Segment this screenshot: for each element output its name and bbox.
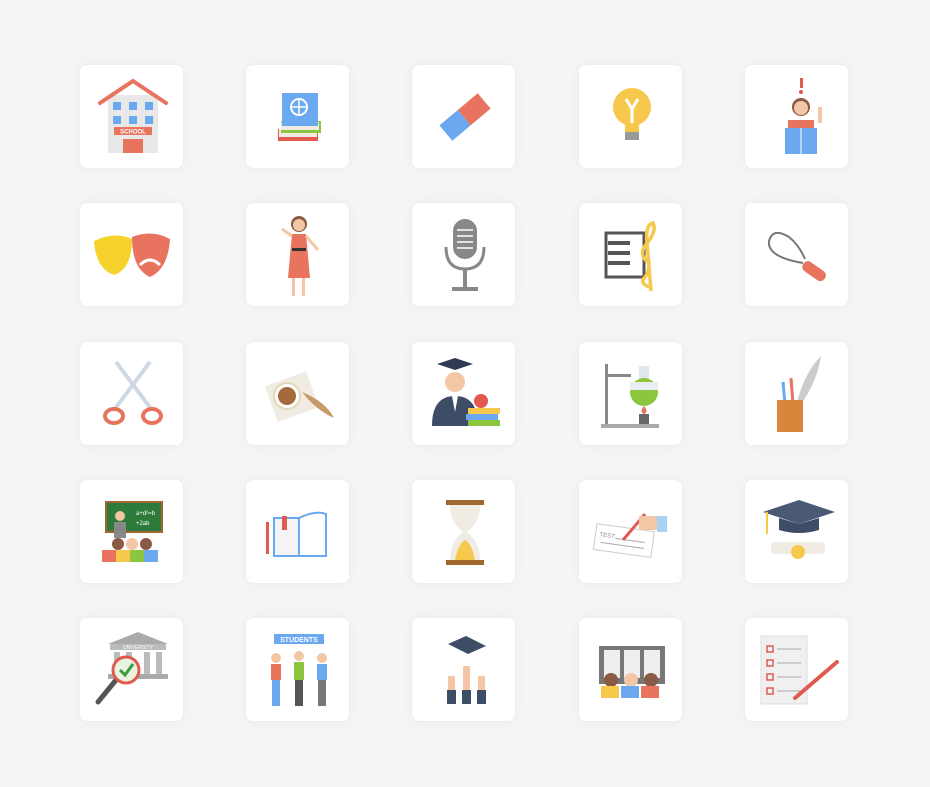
card: university search: UNIVERSITY (123, 645, 154, 651)
card: whistle (744, 202, 849, 307)
card: graduate (411, 341, 516, 446)
card: music (578, 202, 683, 307)
card: cap diploma (744, 479, 849, 584)
card: classroom (578, 617, 683, 722)
card: bulb (578, 64, 683, 169)
card: checklist (744, 617, 849, 722)
card: masks (79, 202, 184, 307)
card: students: STUDENTS (280, 637, 318, 644)
card: students (245, 617, 350, 722)
card: school: SCHOOL (120, 130, 146, 136)
card: microphone (411, 202, 516, 307)
card: coffee quill (245, 341, 350, 446)
card: books globe (245, 64, 350, 169)
card: teacher: a+d²=b (136, 511, 156, 517)
card: eraser (411, 64, 516, 169)
card: open book (245, 479, 350, 584)
card: singer (245, 202, 350, 307)
card: school (79, 64, 184, 169)
card: university search (79, 617, 184, 722)
card: lab (578, 341, 683, 446)
card: teacher: +2ab (136, 521, 150, 527)
card: test (578, 479, 683, 584)
card: teacher (79, 479, 184, 584)
card: hands cap (411, 617, 516, 722)
card: test: TEST (599, 532, 615, 540)
card: reader (744, 64, 849, 169)
card: hourglass (411, 479, 516, 584)
card: pen holder (744, 341, 849, 446)
card: scissors (79, 341, 184, 446)
